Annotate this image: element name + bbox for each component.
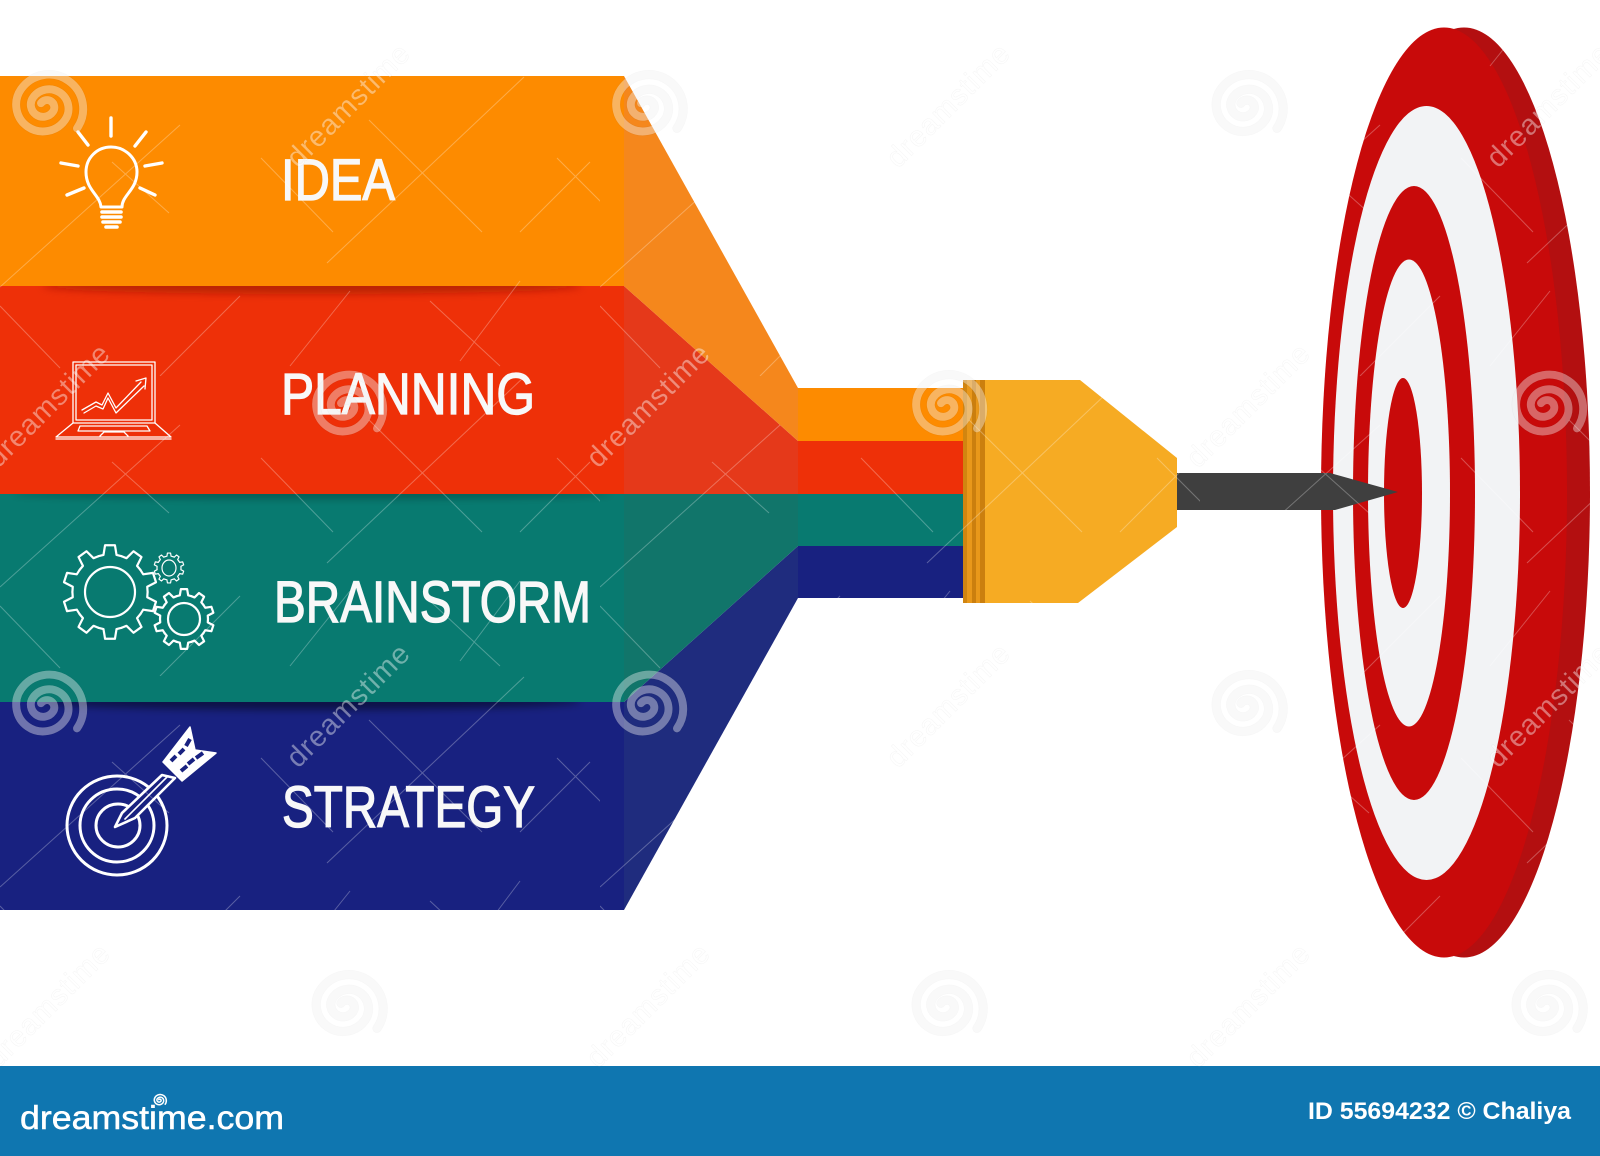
target side edge [1338,28,1590,958]
footer logo spiral [152,1092,169,1108]
dart shaft and point [1177,473,1398,510]
icon: target with arrow [67,727,216,875]
idea band [0,76,624,286]
target board [1321,28,1590,958]
icon: laptop with chart [56,362,171,439]
brainstorm stripe [798,494,964,546]
watermark overlay: dreamstime [880,37,1017,174]
panel: planning [0,278,964,494]
strategy facet [624,546,798,910]
target outer red ring [1321,28,1567,958]
footer logo text: dreamstime.com [20,1099,284,1136]
target middle red ring [1353,186,1475,800]
planning facet [624,286,798,494]
text: BRAINSTORM: BRAINSTORM [274,570,591,635]
target inner white ring [1368,260,1450,726]
icon: light bulb [61,118,162,227]
footer credit: ID 55694232 © Chaliya [1308,1098,1572,1125]
brainstorm facet [624,494,798,702]
text: STRATEGY: STRATEGY [282,775,535,840]
watermark overlay: dreamstime [1180,937,1317,1074]
panel: brainstorm [0,489,964,702]
target outer white ring [1333,106,1520,880]
dart collar stripes [963,380,985,603]
watermark overlay: dreamstime [1180,337,1317,474]
watermark overlay: dreamstime [880,637,1017,774]
text: PLANNING: PLANNING [281,362,535,427]
planning band [0,286,624,494]
watermark overlay: dreamstime [580,937,717,1074]
watermark overlay: dreamstime [280,637,417,774]
footer bar [0,1066,1600,1156]
target bullseye [1384,378,1422,608]
watermark overlay: dreamstime [580,337,717,474]
panel: strategy [0,546,964,910]
dart [963,380,1398,603]
planning stripe [798,441,964,494]
idea facet [624,76,798,441]
icon: gears [62,545,215,649]
strategy band [0,702,624,910]
strategy stripe [798,546,964,598]
watermark overlay: dreamstime [280,37,417,174]
text: IDEA: IDEA [281,148,395,213]
panel: idea [0,76,964,441]
idea stripe [798,388,964,441]
dart flight body [985,380,1177,603]
brainstorm band [0,494,624,702]
